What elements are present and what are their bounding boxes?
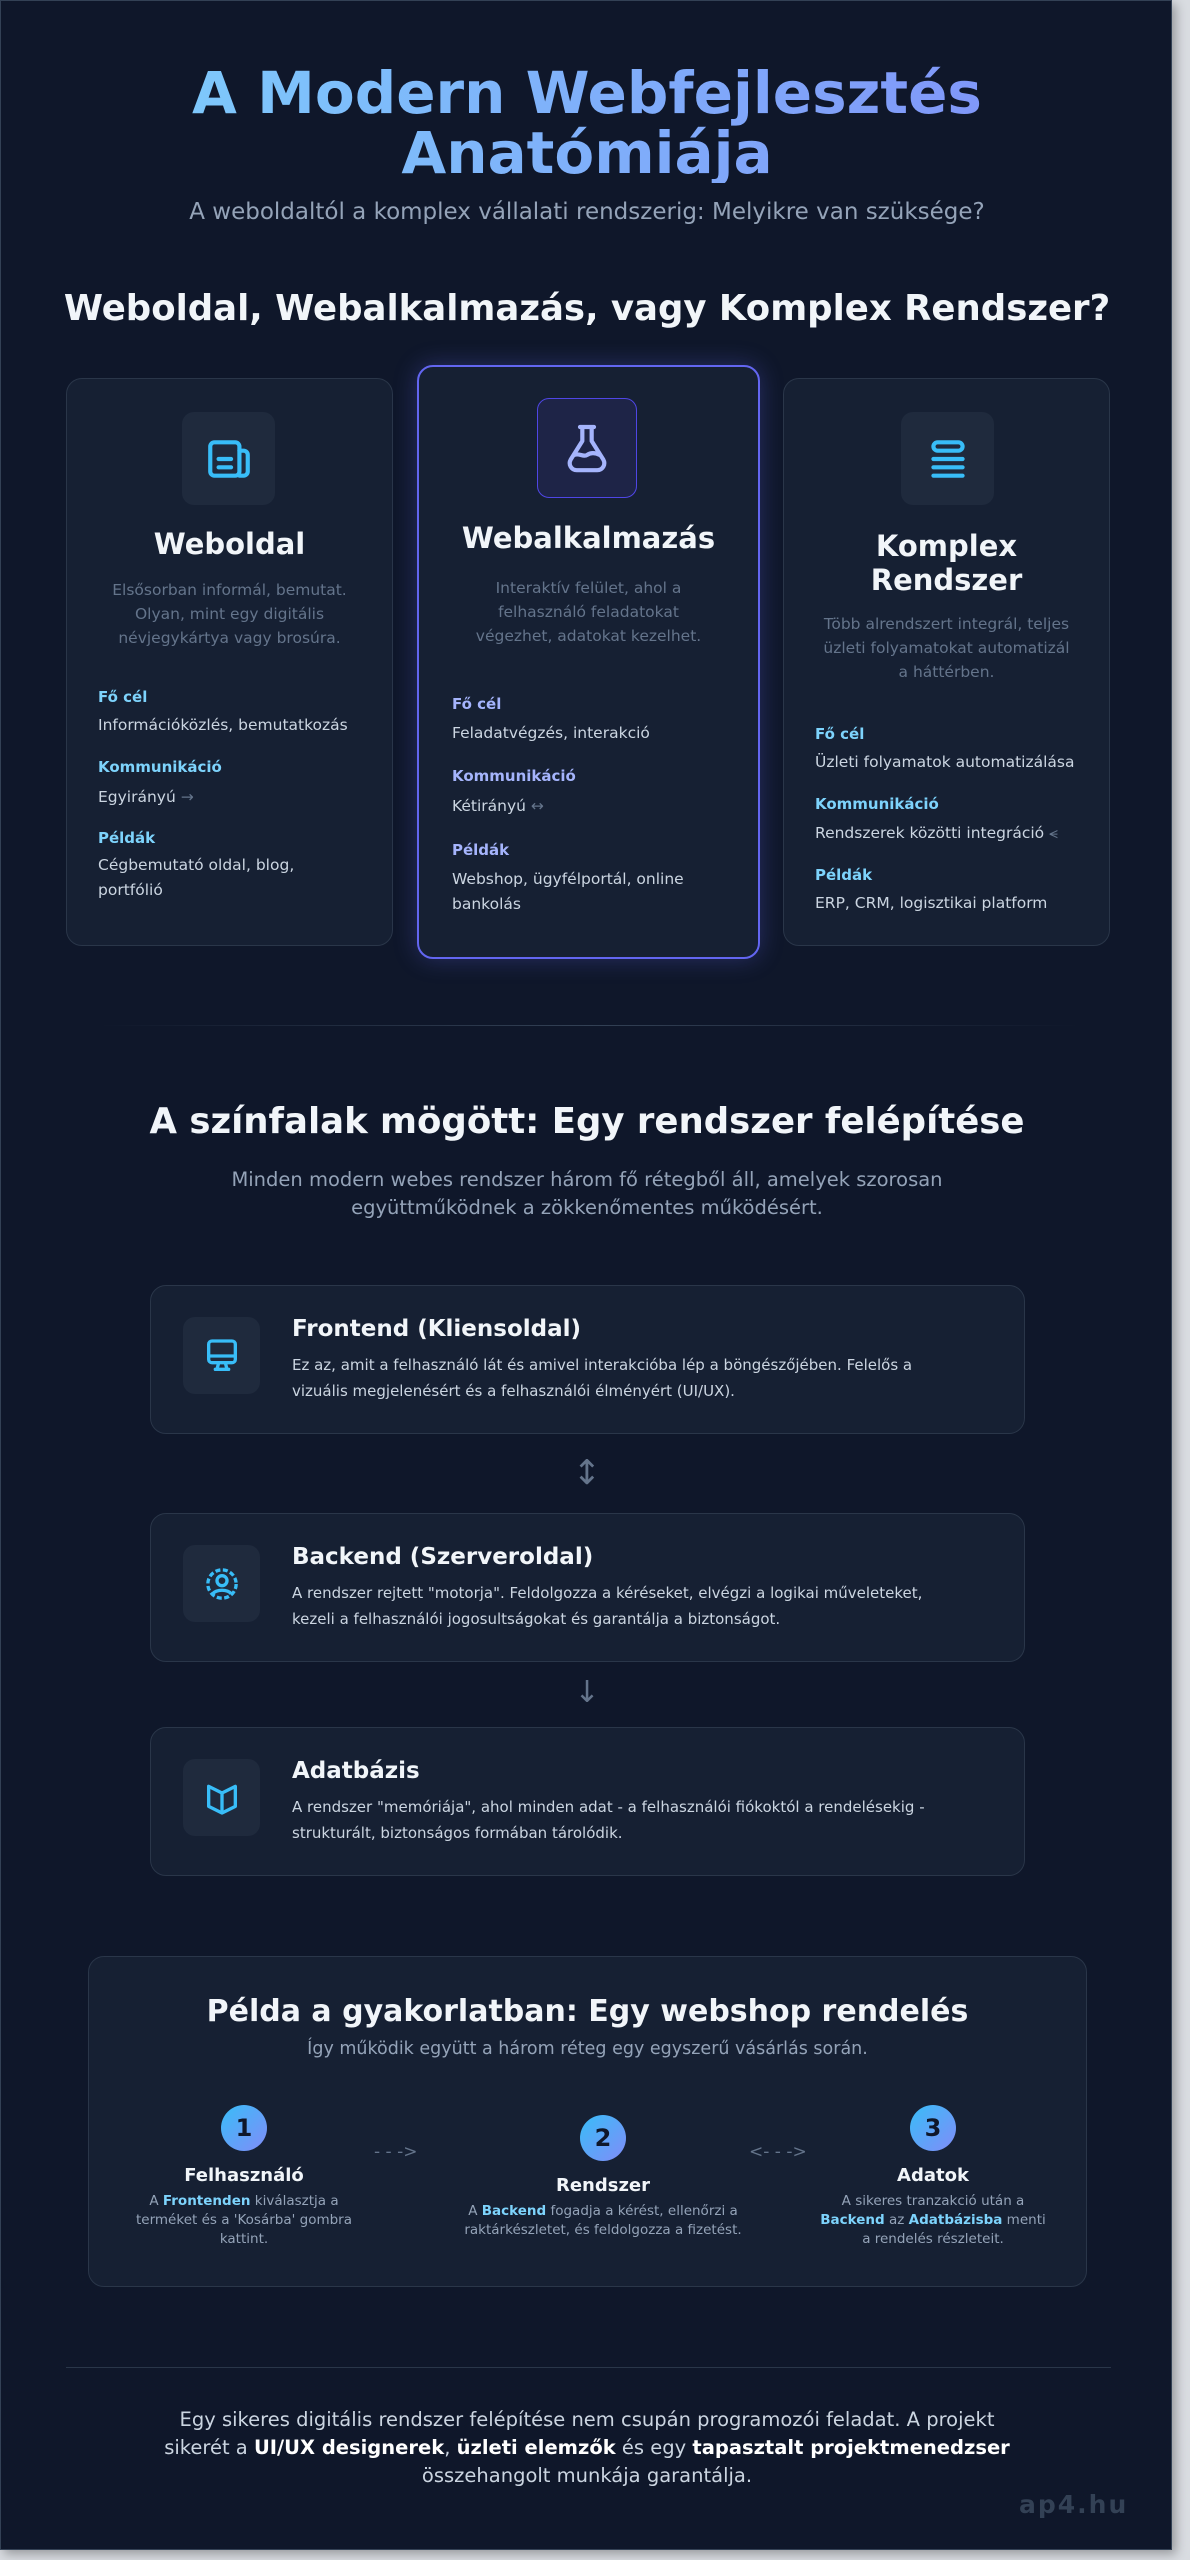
layer: Frontend (150, 1285, 1025, 1434)
icon: monitor (183, 1317, 260, 1394)
watermark: ap4.hu (1019, 2490, 1128, 2519)
details: Kommunikáció (452, 767, 576, 785)
card title: Webalkalmazás (462, 521, 715, 555)
details: Példák (815, 866, 872, 884)
example subtitle: Így működik együtt a három réteg egy egyszerű vásárlás során. (307, 2039, 868, 2059)
layer: Backend (150, 1513, 1025, 1662)
details: Webshop, ügyfélportál, online (452, 870, 684, 888)
footer text: Egy sikeres digitális rendszer felépítése nem csupán programozói feladat. A projekt sikerét a UI/UX designerek, üzleti elemzők és egy tapasztalt projektmenedzser összehangolt munkája garantálja. (164, 2408, 1010, 2487)
step 3: A sikeres tranzakció után a Backend az Adatbázisba menti a rendelés részleteit. (820, 2193, 1046, 2247)
icon: document (182, 412, 275, 505)
icon: flask (537, 398, 637, 498)
step 3: 3 (925, 2114, 941, 2142)
layer: Backend: A rendszer rejtett "motorja". Feldolgozza a kéréseket, elvégzi a logikai műveleteket, kezeli a felhasználói jogosultságokat és garantálja a biztonságot. (292, 1584, 922, 1628)
panel: webshop example (88, 1956, 1087, 2287)
details: Fő cél (815, 725, 864, 743)
arrow: step1 to step2: - - -> (374, 2142, 417, 2162)
details: Feladatvégzés, interakció (452, 724, 650, 742)
details: bankolás (452, 895, 521, 913)
arrow: bidirectional: ↕ (573, 1453, 601, 1493)
layer: Frontend: Ez az, amit a felhasználó lát és amivel interakcióba lép a böngészőjében. Felelős a vizuális megjelenésért és a felhasználói élményért (UI/UX). (292, 1356, 912, 1400)
details: Példák (98, 829, 155, 847)
card title: Komplex (876, 529, 1017, 563)
step 3 (820, 2105, 1046, 2247)
subtitle: A weboldaltól a komplex vállalati rendszerig: Melyikre van szüksége? (189, 199, 985, 225)
layer: Backend: Backend (Szerveroldal) (292, 1544, 593, 1570)
icon: book (183, 1759, 260, 1836)
step 2 (464, 2115, 742, 2238)
heading: architecture: A színfalak mögött: Egy rendszer felépítése (149, 1101, 1024, 1142)
card description: Interaktív felület, ahol a felhasználó feladatokat végezhet, adatokat kezelhet. (476, 579, 701, 645)
details: ERP, CRM, logisztikai platform (815, 894, 1047, 912)
details: Kétirányú ↔ (452, 797, 544, 815)
icon: database stack (901, 412, 994, 505)
arrow: step2 to step3: <- - -> (749, 2142, 807, 2162)
title: A Modern Webfejlesztés (192, 59, 982, 127)
layer: Adatbázis: A rendszer "memóriája", ahol minden adat - a felhasználói fiókoktól a rendelésekig - strukturált, biztonságos formában tárolódik. (292, 1798, 925, 1842)
panel: Webalkalmazás (highlighted) (417, 365, 760, 959)
details: Üzleti folyamatok automatizálása (815, 753, 1074, 771)
heading: comparison: Weboldal, Webalkalmazás, vagy Komplex Rendszer? (64, 288, 1110, 329)
details: Kommunikáció (98, 758, 222, 776)
details: Fő cél (98, 688, 147, 706)
layer: Adatbázis: Adatbázis (292, 1758, 420, 1784)
details (452, 695, 684, 913)
panel: Weboldal (66, 378, 393, 946)
step 1 (136, 2105, 352, 2247)
example heading: Példa a gyakorlatban: Egy webshop rendelés (207, 1994, 968, 2029)
card title: Rendszer (871, 563, 1022, 597)
step 1: A Frontenden kiválasztja a terméket és a 'Kosárba' gombra kattint. (136, 2193, 352, 2247)
card title: Weboldal (154, 527, 305, 561)
details (815, 725, 1074, 912)
details: Cégbemutató oldal, blog, (98, 856, 294, 874)
step 2: A Backend fogadja a kérést, ellenőrzi a raktárkészletet, és feldolgozza a fizetést. (464, 2203, 742, 2238)
card title (871, 529, 1022, 597)
layer: Adatbázis (150, 1727, 1025, 1876)
step 2: 2 (595, 2124, 611, 2152)
section intro: Minden modern webes rendszer három fő rétegből áll, amelyek szorosan együttműködnek a zökkenőmentes működésért. (231, 1168, 943, 1219)
icon: gear (183, 1545, 260, 1622)
details: Egyirányú → (98, 788, 194, 806)
card description: Több alrendszert integrál, teljes üzleti folyamatokat automatizál a háttérben. (823, 615, 1070, 681)
details: Kommunikáció (815, 795, 939, 813)
layer: Frontend: Frontend (Kliensoldal) (292, 1316, 581, 1342)
card description: Elsősorban informál, bemutat. Olyan, mint egy digitális névjegykártya vagy brosúra. (112, 581, 347, 647)
title: Anatómiája (401, 119, 773, 187)
step 1: 1 (236, 2114, 252, 2142)
title (1, 63, 1173, 183)
details: Fő cél (452, 695, 501, 713)
details: Információközlés, bemutatkozás (98, 716, 348, 734)
arrow: down: ↓ (574, 1675, 600, 1710)
step 1: Felhasználó (184, 2165, 304, 2186)
details: Példák (452, 841, 509, 859)
step 3: Adatok (897, 2165, 969, 2186)
details (98, 688, 348, 899)
step 2: Rendszer (556, 2175, 650, 2196)
panel: Komplex Rendszer (783, 378, 1110, 946)
details: Rendszerek közötti integráció ⪪ (815, 824, 1058, 842)
details: portfólió (98, 881, 163, 899)
